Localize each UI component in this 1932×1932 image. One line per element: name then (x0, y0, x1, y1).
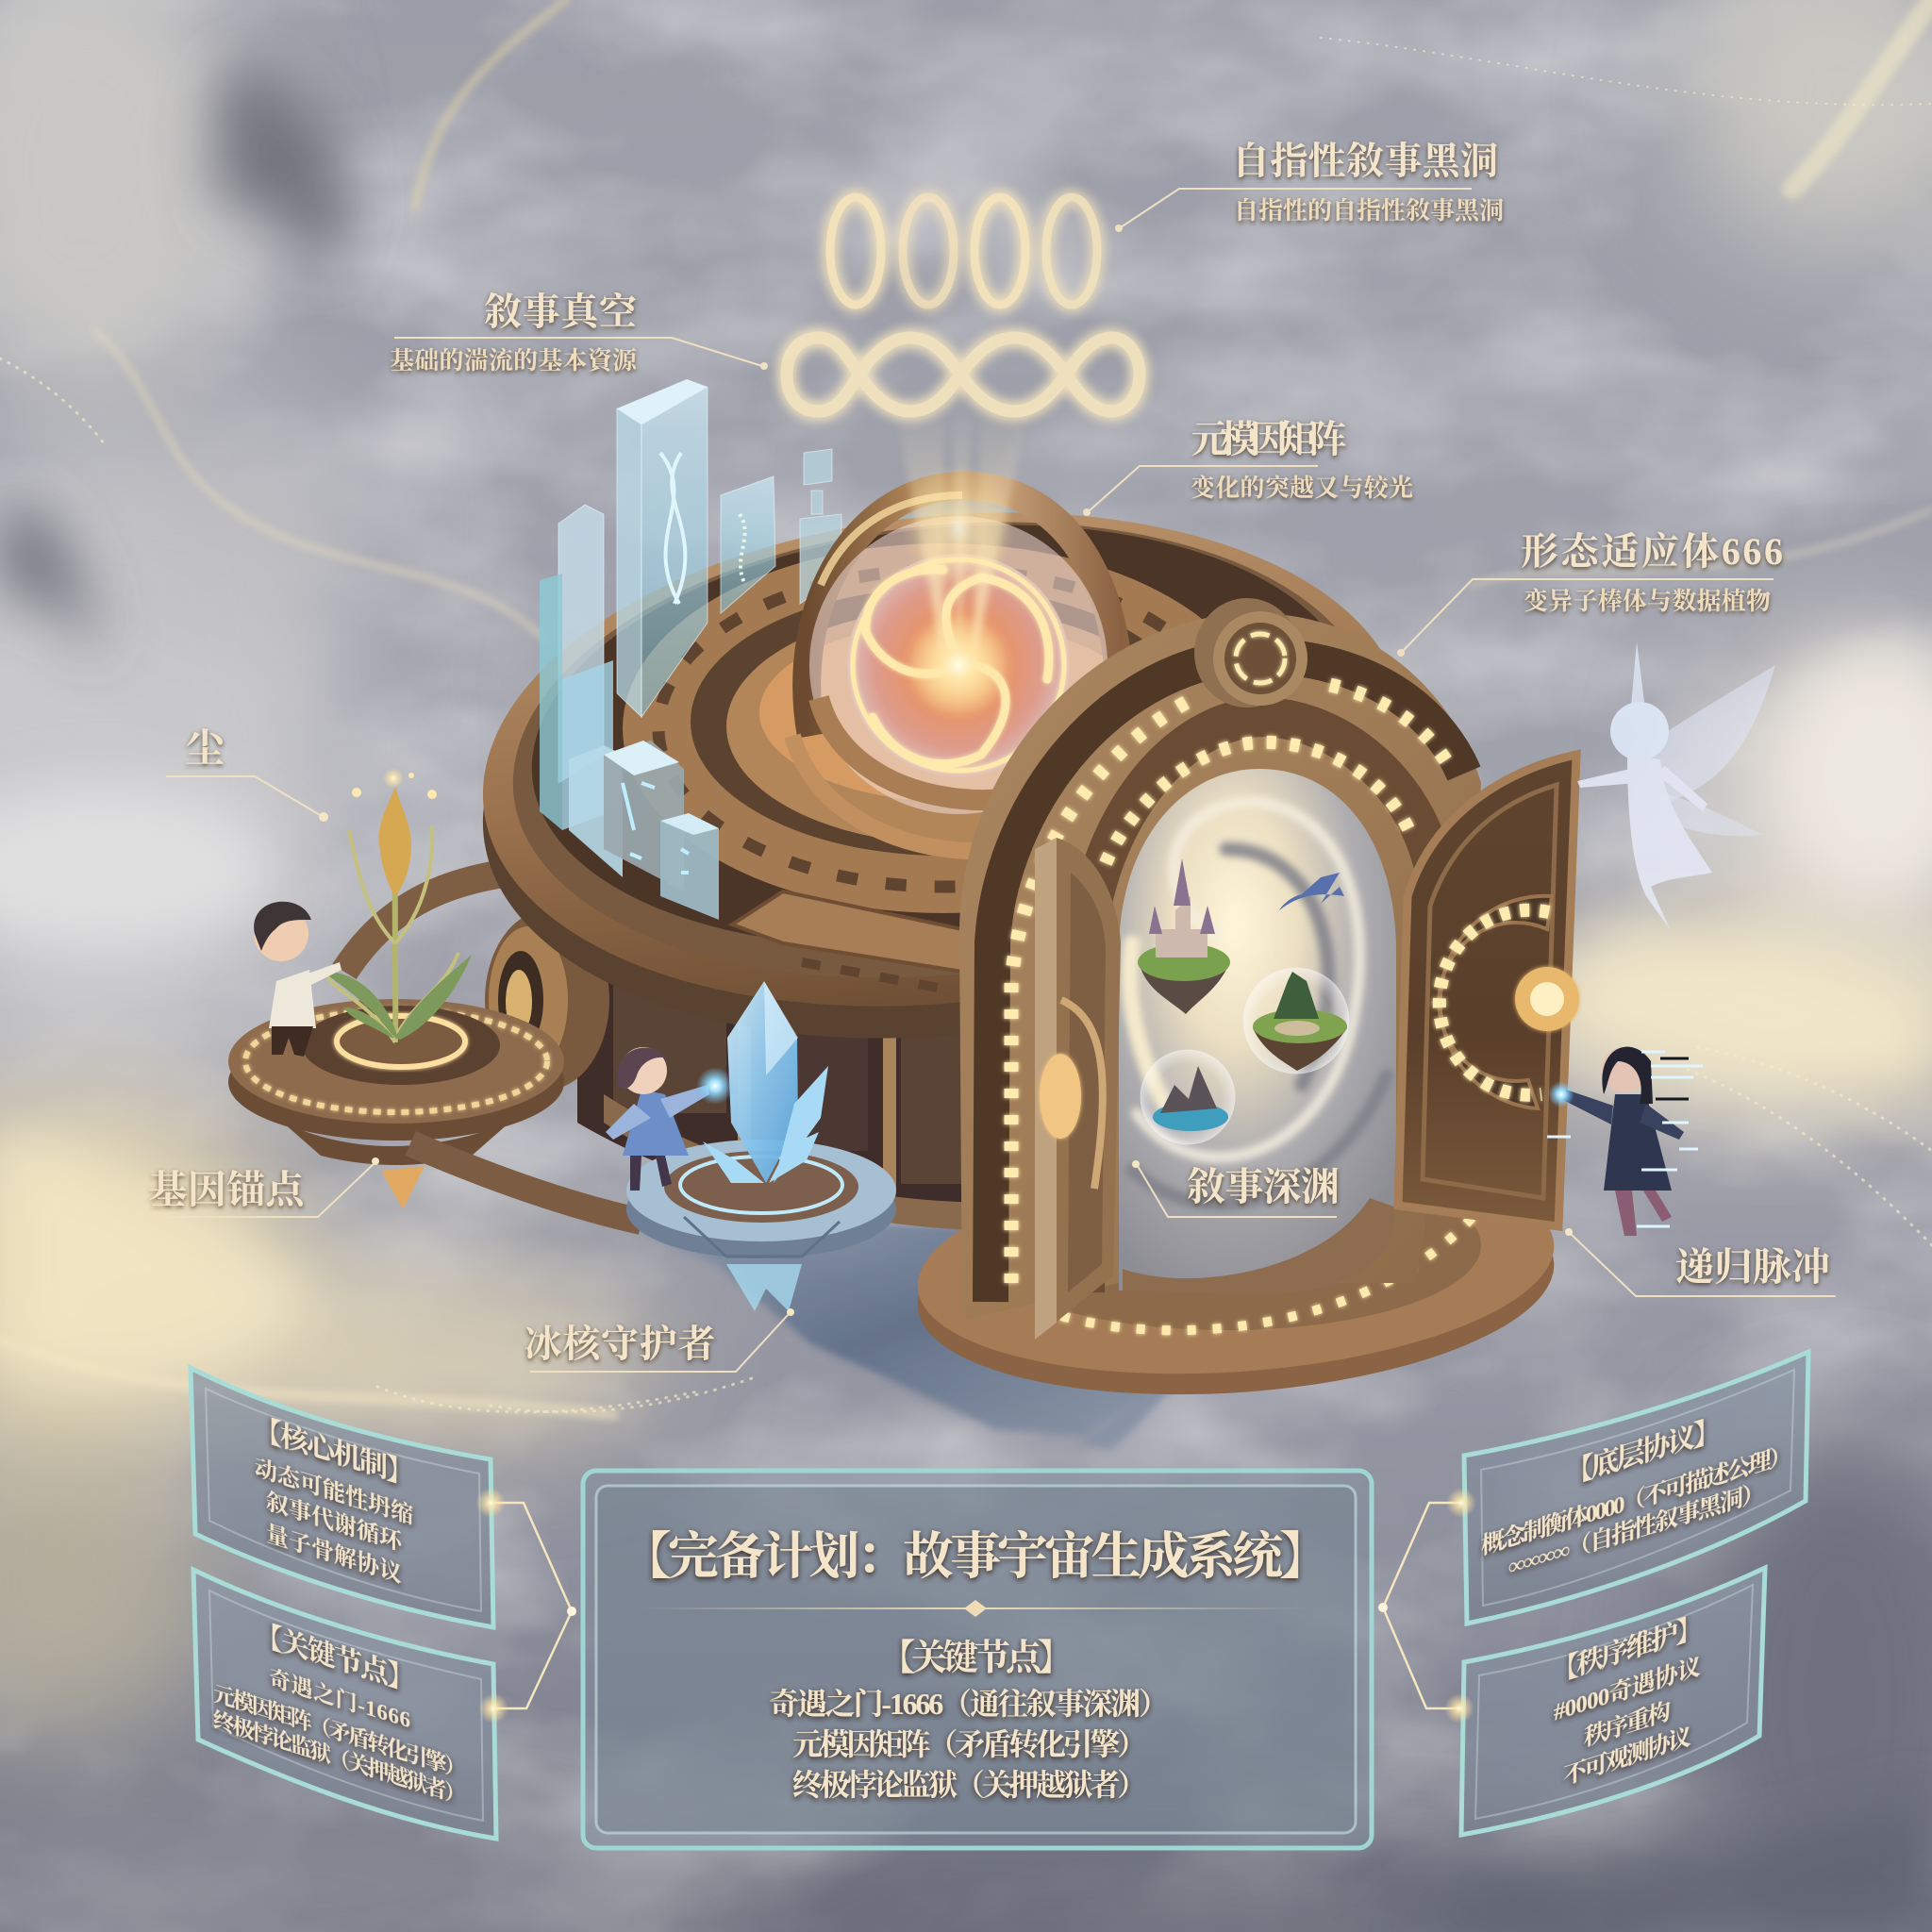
tall DNA crystal (617, 379, 708, 717)
glowing outer runes (1011, 685, 1448, 1283)
gold spike (381, 1166, 425, 1209)
label: narrative vacuum: 敘事真空 (484, 291, 637, 333)
panel: base protocol (1464, 1352, 1808, 1624)
infinity chain (787, 338, 1140, 411)
carved ring with engraved runes (623, 543, 1264, 913)
label: ice core guardian (525, 1308, 794, 1372)
back arc bridge to sprout platform (344, 873, 509, 972)
fairy (1577, 641, 1775, 929)
label: narrative abyss: 敘事深渊 (1187, 1165, 1340, 1208)
label: narrative vacuum: 基础的湍流的基本資源 (390, 347, 639, 375)
boy figure (254, 902, 341, 1057)
label: morphic adaptor 666: 变异子棒体与数据植物 (1524, 587, 1771, 615)
spaceship (1279, 873, 1344, 910)
panel: order maintenance: #0000奇遇协议 (1554, 1652, 1701, 1726)
0000 glowing rings (830, 197, 1097, 305)
lower arc bridge (410, 1143, 641, 1222)
glowing sprout with gold bud (325, 768, 472, 1042)
forest bubble island (1243, 968, 1349, 1074)
top disc of the machine (458, 469, 1429, 1082)
tall small slabs (721, 476, 775, 613)
label: meta-gene matrix: 变化的突越又与较光 (1191, 475, 1413, 502)
ice crystal platform (626, 1140, 896, 1258)
panel: order maintenance: 不可观测协议 (1563, 1722, 1691, 1790)
panel: base protocol: 【底层协议】 (1566, 1413, 1721, 1491)
label: morphic adaptor 666: 形态适应体666 (1521, 530, 1783, 573)
panel: key nodes left: 【关键节点】 (255, 1617, 415, 1698)
panel: core mechanism (191, 1368, 493, 1627)
label: morphic adaptor 666 (1397, 530, 1783, 657)
panel: key nodes left (193, 1570, 496, 1839)
underside rock shards (604, 1217, 1174, 1451)
key nodes text block: 元模因矩阵（矛盾转化引擎） (792, 1727, 1147, 1761)
panel: key nodes left: 奇遇之门-1666 (269, 1665, 410, 1734)
glass data crystals (540, 379, 841, 920)
water bubble island (1141, 1050, 1235, 1144)
right door (1398, 755, 1579, 1226)
glowing base runes (1061, 1208, 1481, 1330)
main title: 【完备计划：故事宇宙生成系统】 (621, 1528, 1330, 1585)
scroll ornament on drum (485, 910, 609, 1090)
left connector (475, 1488, 576, 1724)
floating castle island (1138, 858, 1230, 1014)
label: ice core guardian: 冰核守护者 (525, 1323, 715, 1365)
step plate on the rim (732, 891, 962, 972)
portal gate base disk (910, 1139, 1561, 1414)
label: self-referential black hole: 自指性敘事黑洞 (1232, 140, 1498, 182)
panel: base protocol: 概念制衡体0000（不可描述公理） (1481, 1440, 1792, 1559)
portal arch (959, 598, 1481, 1321)
glitching girl (1547, 1047, 1703, 1236)
label: recursive pulse: 递归脉冲 (1675, 1245, 1830, 1289)
front data blocks (569, 741, 719, 920)
lower drum with carved panels (485, 896, 1000, 1231)
panel: core mechanism: 【核心机制】 (254, 1411, 414, 1492)
panel: core mechanism: 叙事代谢循环 (266, 1488, 404, 1557)
key nodes text block (769, 1639, 1169, 1802)
title divider ornament (641, 1600, 1311, 1617)
glowing inner runes (1106, 742, 1413, 863)
medallion (1194, 598, 1307, 708)
left door (1035, 838, 1121, 1340)
key nodes text block: 奇遇之门-1666（通往叙事深渊） (769, 1687, 1169, 1721)
label: self-referential black hole: 自指性的自指性敘事黑洞 (1234, 197, 1504, 225)
right connector (1378, 1488, 1476, 1724)
ice crystal (703, 981, 828, 1183)
panel: core mechanism: 动态可能性坍缩 (255, 1454, 413, 1529)
sprout platform (228, 999, 564, 1209)
label: meta-gene matrix (1083, 418, 1413, 516)
label: dust: 尘 (185, 727, 227, 772)
label: meta-gene matrix: 元模因矩阵 (1191, 418, 1347, 460)
label: narrative abyss (1132, 1160, 1340, 1217)
glowing energy orb (809, 516, 1108, 814)
label: dust (166, 727, 328, 822)
label: gene anchor: 基因锚点 (149, 1168, 308, 1211)
armillary back ring (807, 486, 1120, 745)
panel: order maintenance (1461, 1568, 1765, 1835)
key nodes text block: 【关键节点】 (879, 1639, 1074, 1678)
panel: main title card (583, 1471, 1372, 1848)
panel: order maintenance: 秩序重构 (1584, 1697, 1671, 1752)
panel: order maintenance: 【秩序维护】 (1552, 1610, 1703, 1689)
panel: key nodes left: 元模因矩阵（矛盾转化引擎） (213, 1680, 466, 1784)
label: narrative vacuum (390, 291, 768, 375)
panel: key nodes left: 终极悖论监狱（关押越狱者） (213, 1707, 466, 1810)
girl casting spark (606, 1047, 734, 1191)
panel: base protocol: ∞∞∞∞（自指性叙事黑洞） (1508, 1477, 1765, 1581)
panel: core mechanism: 量子骨解协议 (266, 1520, 402, 1588)
key nodes text block: 终极悖论监狱（关押越狱者） (792, 1768, 1147, 1802)
label: gene anchor (148, 1158, 379, 1217)
label: self-referential black hole (1115, 140, 1504, 232)
portal vortex (1119, 769, 1396, 1294)
label: recursive pulse (1565, 1228, 1836, 1296)
armillary front ring and light rays (792, 406, 1141, 851)
